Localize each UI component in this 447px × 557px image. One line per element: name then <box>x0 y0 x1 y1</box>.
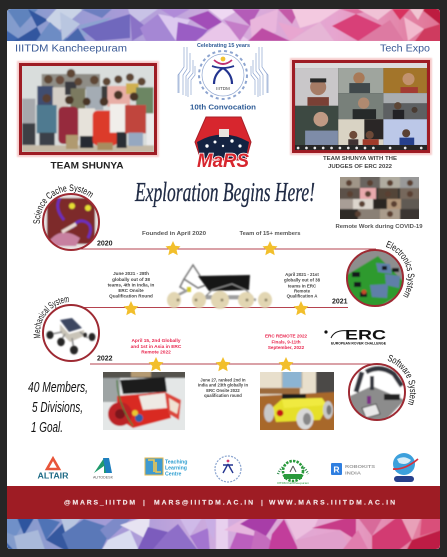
milestone: june 2021: teams, 4th in India, in <box>108 282 155 288</box>
sponsor: Altair <box>38 458 69 480</box>
sponsor: Altair: ALTAIR <box>38 472 69 480</box>
system: science cache: Science Cache System <box>33 184 93 224</box>
milestone: june 2022 <box>198 378 248 398</box>
caption: judges <box>323 156 397 170</box>
milestone: team size: Team of 15+ members <box>240 231 300 237</box>
timeline line 2022 <box>90 363 378 365</box>
logo: celebrating 15 years convocation: Celebrating 15 years <box>197 43 250 49</box>
sponsor: Robokits India: R <box>333 464 340 474</box>
milestone: april 2022: April 15, 2nd Globally <box>131 338 181 344</box>
milestone: april 2021: globally out of 38 <box>284 278 321 282</box>
sponsor: Robokits India <box>331 463 376 476</box>
year label 2021: 2021 <box>332 298 348 306</box>
year label 2022: 2022 <box>97 356 113 362</box>
milestone: april 2021: teams in ERC <box>288 284 317 288</box>
system: electronics: Electronics System <box>386 240 414 298</box>
milestone: erc finals <box>265 334 308 350</box>
milestone: june 2021: Qualification Round <box>109 294 153 298</box>
sponsor: globe <box>393 453 418 482</box>
milestone: april 2021: Remote <box>294 288 311 294</box>
system: mechanical: Mechanical System <box>34 297 69 338</box>
milestone: june 2021: globally out of 38 <box>112 277 150 282</box>
header: Tech Expo: Tech Expo <box>380 44 430 54</box>
milestone: april 2021: April 2021 - 21st <box>285 272 319 277</box>
system: electronics <box>346 240 414 307</box>
tagline: 1 Goal. <box>31 420 63 436</box>
sponsor: RIC: IIITDM Kancheepuram <box>277 481 310 485</box>
milestone: april 2022: Remote 2022 <box>141 350 171 356</box>
system: mechanical <box>34 297 100 362</box>
sponsor: Autodesk: AUTODESK <box>93 476 114 480</box>
milestone: founded: Founded in April 2020 <box>142 231 206 237</box>
sponsor: teaching learning centre <box>145 458 187 478</box>
milestone: april 2022 <box>131 338 182 356</box>
milestone: april 2021 <box>284 272 321 298</box>
caption: judges: JUDGES OF ERC 2022 <box>328 164 392 170</box>
tagline <box>28 380 88 436</box>
logo: MaRS <box>195 117 251 172</box>
logo: celebrating 15 years convocation <box>178 43 268 112</box>
bottom polygon banner <box>7 519 440 549</box>
caption: team shunya: TEAM SHUNYA <box>50 160 124 170</box>
logo: celebrating 15 years convocation: 10th Convocation <box>190 102 256 112</box>
footer contact bar <box>7 486 440 519</box>
footer contact bar: MARS@IIITDM.AC.IN <box>154 500 253 506</box>
tagline: 5 Divisions, <box>32 400 83 416</box>
sponsor: teaching learning centre: Centre <box>165 472 182 478</box>
sponsor: IIITDM <box>215 456 241 482</box>
milestone: april 2022: and 1st in Asia in ERC <box>131 344 182 350</box>
milestone: june 2021: ERC Onsite <box>118 288 144 293</box>
milestone: june 2022: qualification round <box>204 393 242 398</box>
footer contact bar: | <box>261 500 263 506</box>
sponsor: Autodesk <box>93 458 114 480</box>
caption: judges: TEAM SHUNYA WITH THE <box>323 156 397 162</box>
top polygon banner <box>7 9 440 41</box>
footer contact bar: @MARS_IIITDM <box>64 500 135 506</box>
photo: team shunya <box>17 60 160 157</box>
milestone: june 2021 <box>108 271 155 298</box>
milestone: june 2022: ERC Onsite 2022 <box>206 388 240 393</box>
logo: ERC: ERC <box>345 326 386 342</box>
title: Exploration Begins Here! <box>134 177 315 207</box>
milestone: june 2022: India and 23th globally in <box>198 382 248 388</box>
sponsor: teaching learning centre: Learning <box>165 466 187 472</box>
sponsor: Robokits India: ROBOKITS <box>345 464 376 470</box>
milestone: erc finals: Finals, 9-11th <box>271 340 301 344</box>
footer contact bar: WWW.MARS.IIITDM.AC.IN <box>269 500 395 506</box>
system: software: Software System <box>388 354 416 405</box>
system: software <box>348 354 416 421</box>
sponsor: teaching learning centre: Teaching <box>165 460 187 466</box>
sponsor: RIC <box>277 461 310 485</box>
timeline line 2021 <box>80 306 348 308</box>
photo: red robot <box>103 372 185 430</box>
rover image <box>167 265 272 309</box>
logo: MaRS: MaRS <box>197 151 249 172</box>
header: IIITDM Kancheepuram: IIITDM Kancheepuram <box>15 44 127 54</box>
sponsor: Robokits India: INDIA <box>345 470 362 476</box>
timeline line 2020 <box>80 248 376 250</box>
milestone: april 2021: Qualification A <box>287 294 318 298</box>
logo: celebrating 15 years convocation: IIITDM <box>216 86 230 91</box>
milestones: stars <box>124 241 308 371</box>
system: science cache <box>33 184 100 251</box>
milestone: june 2021: June 2021 - 28th <box>113 271 149 276</box>
logo: ERC <box>324 326 386 345</box>
footer contact bar: | <box>143 500 145 506</box>
milestone: erc finals: ERC REMOTE 2022 <box>265 334 308 338</box>
photo: judges video call <box>290 58 432 155</box>
caption: remote work: Remote Work during COVID-19 <box>336 224 423 230</box>
photo: yellow simulated car <box>260 372 334 430</box>
photo: remote work <box>340 177 419 219</box>
year label 2020: 2020 <box>97 240 113 248</box>
tagline: 40 Members, <box>28 380 88 396</box>
milestone: erc finals: September, 2022 <box>268 345 305 350</box>
milestone: june 2022: June 27, ranked 2nd in <box>200 378 246 382</box>
logo: ERC: EUROPEAN ROVER CHALLENGE <box>331 341 386 345</box>
